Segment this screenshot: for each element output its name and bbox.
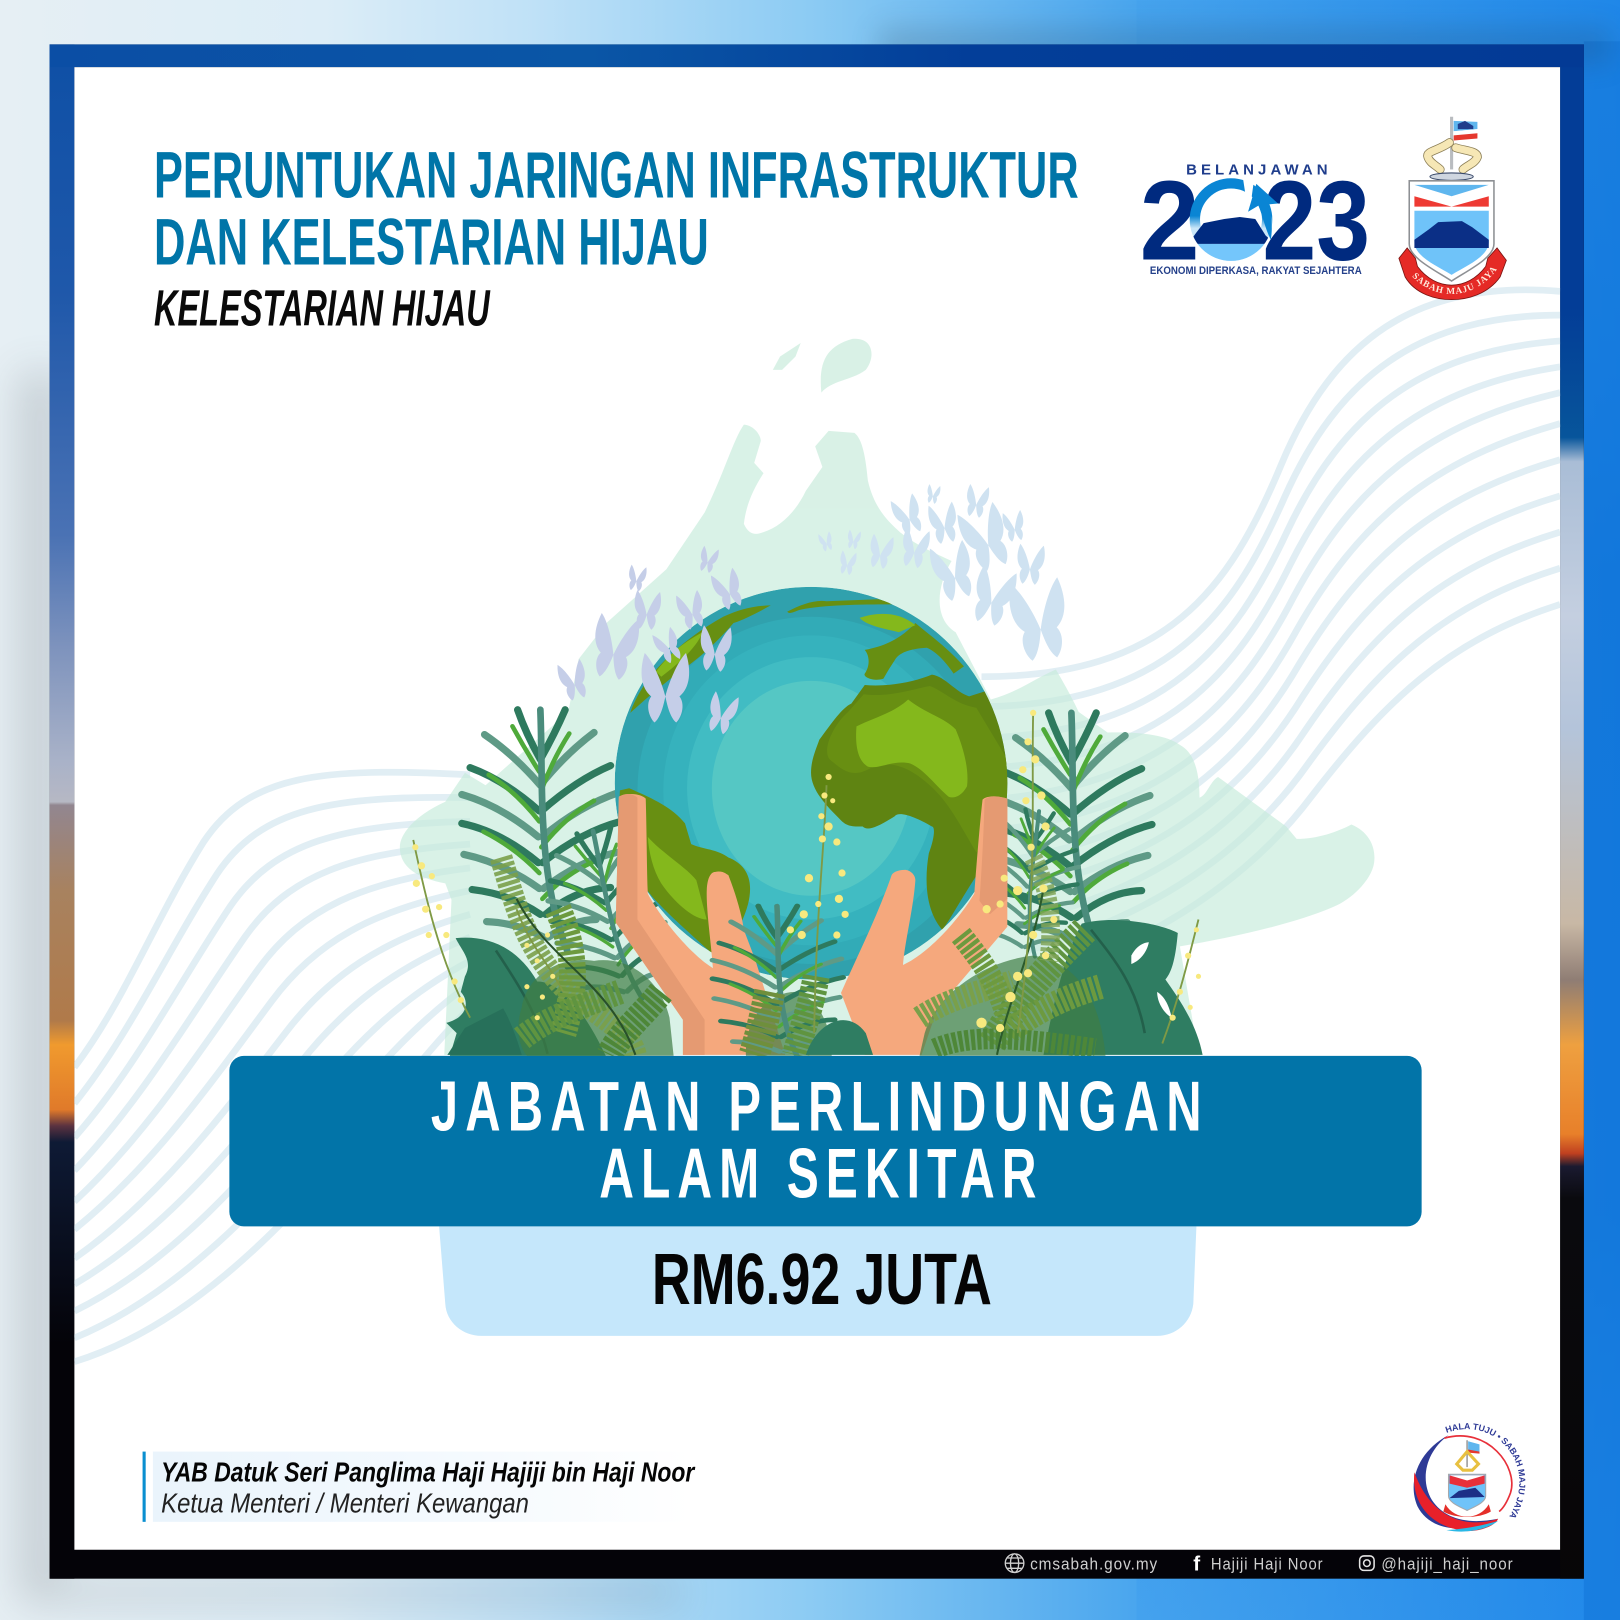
department banner: JABATAN PERLINDUNGAN bbox=[431, 1066, 1209, 1145]
olive fern cluster left bbox=[501, 858, 661, 1055]
right hand bbox=[841, 796, 1007, 1055]
ferns behind globe bbox=[462, 710, 1152, 1012]
continent: Americas-like north bbox=[630, 605, 771, 713]
icon: globe bbox=[1005, 1554, 1024, 1572]
hands bbox=[616, 794, 1007, 1055]
butterflies: pale blue bbox=[818, 484, 1072, 663]
continent: Africa-like bbox=[811, 675, 1018, 930]
title: DAN KELESTARIAN HIJAU bbox=[154, 205, 709, 279]
title bbox=[154, 138, 1079, 279]
globe bbox=[615, 587, 1018, 979]
footer social links: @hajiji_haji_noor bbox=[1381, 1554, 1514, 1573]
continent: Europe-like bbox=[864, 623, 964, 680]
butterflies: lavender bbox=[556, 545, 747, 736]
subtitle: KELESTARIAN HIJAU bbox=[154, 279, 491, 336]
logo: Hala Tuju Sabah Maju Jaya bbox=[1414, 1423, 1526, 1532]
footer social links: cmsabah.gov.my bbox=[1030, 1554, 1158, 1573]
flag and arms bbox=[1428, 117, 1477, 180]
logo: Belanjawan 2023: BELANJAWAN bbox=[1186, 162, 1328, 179]
department banner: ALAM SEKITAR bbox=[599, 1133, 1043, 1212]
logo: Belanjawan 2023 bbox=[1143, 164, 1366, 276]
mini crest bbox=[1443, 1440, 1491, 1517]
logo: Belanjawan 2023: EKONOMI DIPERKASA, RAKYAT SEJAHTERA bbox=[1150, 265, 1362, 277]
logo: Sabah state crest: SABAH MAJU JAYA bbox=[1412, 268, 1497, 294]
ribbon bbox=[1399, 248, 1506, 300]
olive fern cluster right bbox=[920, 858, 1100, 1055]
dark leaf base center bbox=[806, 1020, 873, 1055]
logo: Belanjawan 2023: 2 bbox=[1140, 157, 1200, 284]
foliage shadow masses bbox=[518, 956, 1105, 1056]
continent: north strip bbox=[787, 599, 899, 613]
wave lines: lower left bbox=[74, 772, 470, 1362]
attribution block: YAB Datuk Seri Panglima Haji Hajiji bin Haji Noor bbox=[161, 1457, 696, 1488]
footer social links: Hajiji Haji Noor bbox=[1211, 1554, 1323, 1573]
shield bbox=[1409, 181, 1494, 281]
logo: Sabah state crest bbox=[1398, 116, 1507, 300]
wave lines: upper right bbox=[982, 290, 1560, 982]
left hand bbox=[616, 794, 785, 1055]
attribution block: Ketua Menteri / Menteri Kewangan bbox=[161, 1488, 529, 1519]
footer social links bbox=[1005, 1552, 1514, 1575]
department banner lower tab bbox=[439, 1226, 1196, 1336]
foreground plants bbox=[501, 858, 1105, 1060]
icon: facebook: f bbox=[1193, 1552, 1200, 1575]
continent: South America-like bbox=[620, 788, 750, 961]
logo: Belanjawan 2023: 23 bbox=[1263, 157, 1370, 284]
attribution block bbox=[143, 1452, 696, 1522]
allocation amount: RM6.92 JUTA bbox=[652, 1240, 992, 1320]
logo: Hala Tuju Sabah Maju Jaya: HALA TUJU • SABAH MAJU JAYA bbox=[1445, 1423, 1526, 1518]
department banner bbox=[229, 1056, 1422, 1226]
title: PERUNTUKAN JARINGAN INFRASTRUKTUR bbox=[154, 138, 1079, 212]
map of Sabah silhouette bbox=[400, 339, 1374, 1055]
monstera leaves bbox=[446, 920, 1203, 1064]
icon: instagram bbox=[1360, 1556, 1374, 1570]
center small fern bbox=[713, 906, 843, 1060]
flower sprigs bbox=[412, 710, 1201, 1043]
center olive fern bbox=[754, 992, 770, 1055]
